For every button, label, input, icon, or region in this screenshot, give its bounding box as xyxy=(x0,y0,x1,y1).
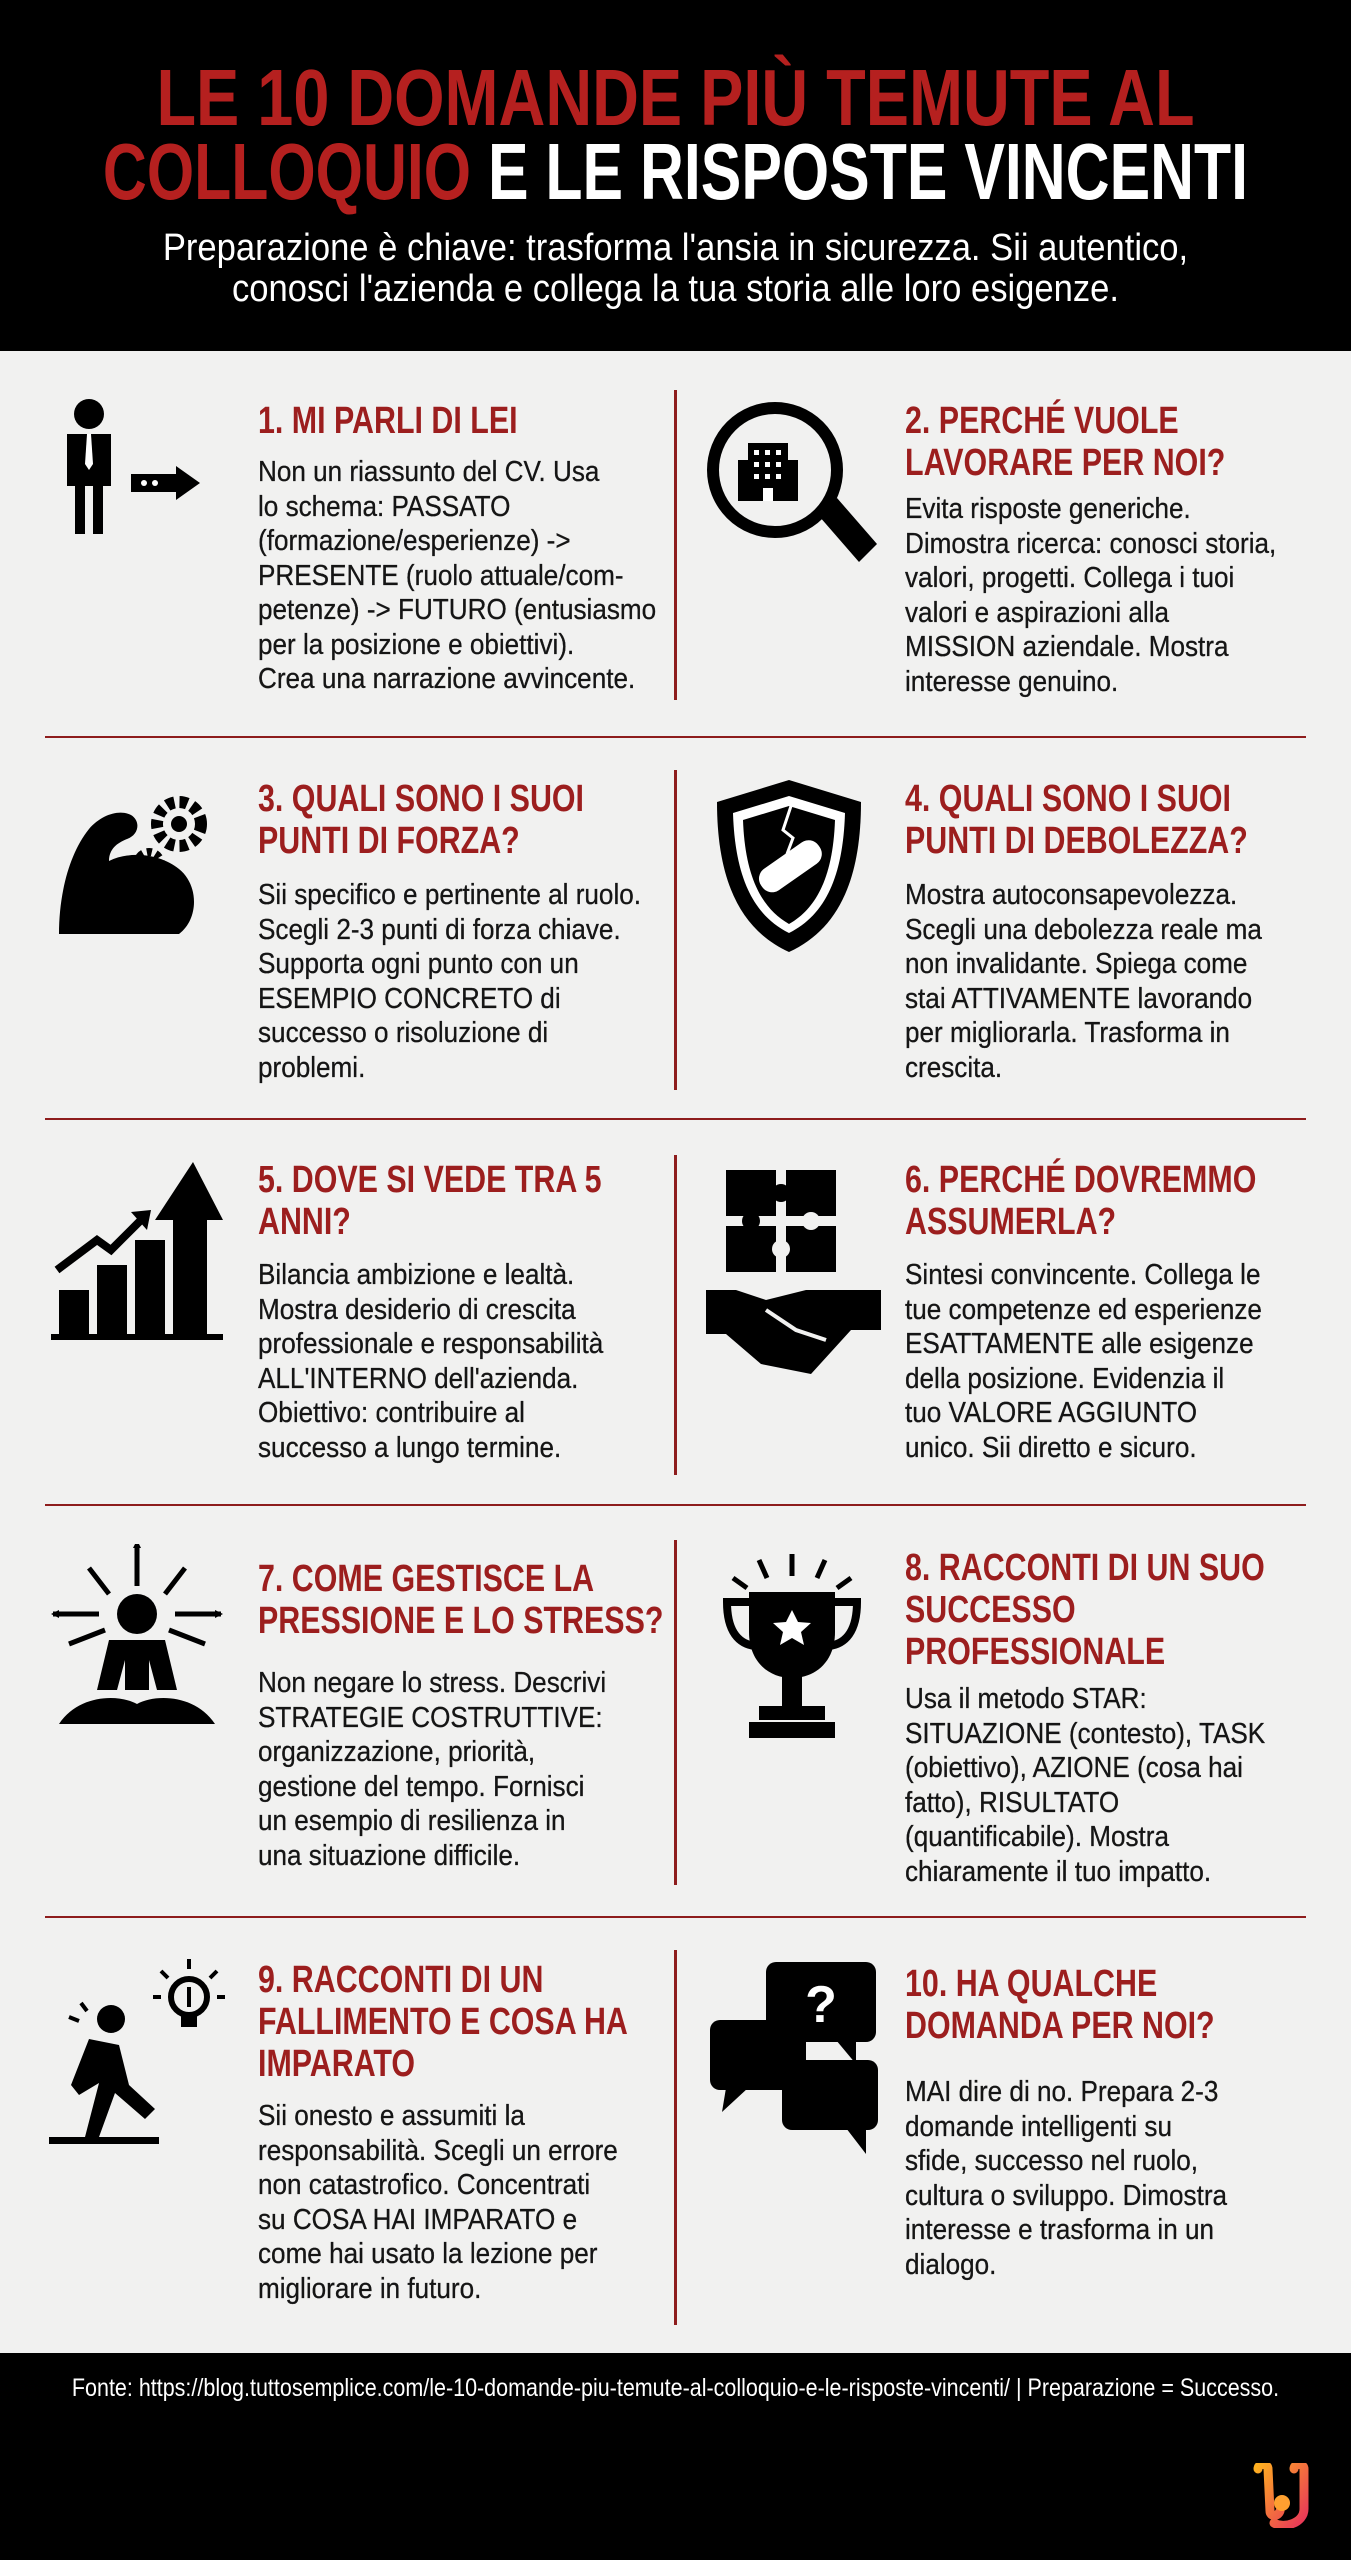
body 9: migliorare in futuro. xyxy=(258,2272,481,2304)
icon: falling person with bulb xyxy=(49,1959,225,2144)
heading 7: PRESSIONE E LO STRESS? xyxy=(258,1600,663,1642)
icon: person with arrow xyxy=(67,399,200,534)
panel 10 xyxy=(710,1962,1228,2280)
body 4: Mostra autoconsapevolezza. xyxy=(905,879,1237,911)
body 2 xyxy=(904,493,1276,698)
body 3 xyxy=(258,879,641,1084)
body 5: ALL'INTERNO dell'azienda. xyxy=(258,1362,578,1394)
icon: chat bubbles xyxy=(710,1962,878,2154)
source text: Fonte: https://blog.tuttosemplice.com/le-10-domande-piu-temute-al-colloquio-e-le-risposte-vincenti/ | Preparazione = Successo. xyxy=(72,2374,1279,2402)
body 3: Sii specifico e pertinente al ruolo. xyxy=(258,879,641,911)
body 6: tuo VALORE AGGIUNTO xyxy=(905,1397,1197,1429)
header: COLLOQUIO E LE RISPOSTE VINCENTI xyxy=(103,127,1248,216)
logo xyxy=(1250,2463,1312,2528)
panel 1 xyxy=(67,399,656,695)
icon: trophy xyxy=(723,1554,861,1738)
body 6: della posizione. Evidenzia il xyxy=(905,1362,1224,1394)
heading 5: ANNI? xyxy=(258,1201,351,1243)
heading 2: LAVORARE PER NOI? xyxy=(905,442,1225,484)
icon: chat bubbles: ? xyxy=(805,1976,837,2034)
body 9: responsabilità. Scegli un errore xyxy=(258,2134,618,2166)
panel 7 xyxy=(51,1544,663,1872)
panel 8 xyxy=(723,1547,1266,1888)
subtitle: Preparazione è chiave: trasforma l'ansia in sicurezza. Sii autentico, xyxy=(163,227,1188,269)
body 9: come hai usato la lezione per xyxy=(258,2238,598,2270)
icon: puzzle handshake xyxy=(706,1170,881,1374)
panel 4 xyxy=(717,778,1262,1084)
heading 9: FALLIMENTO E COSA HA xyxy=(258,2001,628,2043)
heading 1: 1. MI PARLI DI LEI xyxy=(258,400,518,442)
heading 8: SUCCESSO xyxy=(905,1589,1076,1631)
body 8: chiaramente il tuo impatto. xyxy=(905,1856,1211,1888)
body 1: (formazione/esperienze) -> xyxy=(258,525,571,557)
body 6: unico. Sii diretto e sicuro. xyxy=(905,1432,1197,1464)
body 6: Sintesi convincente. Collega le xyxy=(905,1259,1260,1291)
body 4: Scegli una debolezza reale ma xyxy=(905,914,1262,946)
body 9: Sii onesto e assumiti la xyxy=(258,2100,525,2132)
heading 10: 10. HA QUALCHE xyxy=(905,1963,1157,2005)
body 7: organizzazione, priorità, xyxy=(258,1736,535,1768)
heading 10: DOMANDA PER NOI? xyxy=(905,2005,1215,2047)
body 10: domande intelligenti su xyxy=(905,2110,1172,2142)
body 2: Evita risposte generiche. xyxy=(905,493,1191,525)
body 5: Mostra desiderio di crescita xyxy=(258,1294,576,1326)
heading 5: 5. DOVE SI VEDE TRA 5 xyxy=(258,1159,602,1201)
body 7: STRATEGIE COSTRUTTIVE: xyxy=(258,1702,603,1734)
body 10: cultura o sviluppo. Dimostra xyxy=(905,2180,1227,2212)
body 2: Dimostra ricerca: conosci storia, xyxy=(905,528,1276,560)
body 8: SITUAZIONE (contesto), TASK xyxy=(905,1718,1265,1750)
body 6: tue competenze ed esperienze xyxy=(905,1294,1262,1326)
icon: shield with bandage xyxy=(717,780,861,952)
body 2: valori, progetti. Collega i tuoi xyxy=(905,562,1234,594)
body 7: un esempio di resilienza in xyxy=(258,1805,566,1837)
subtitle xyxy=(163,227,1188,310)
heading 9: IMPARATO xyxy=(258,2043,415,2085)
subtitle: conosci l'azienda e collega la tua storia alle loro esigenze. xyxy=(232,268,1119,310)
body 1: petenze) -> FUTURO (entusiasmo xyxy=(258,594,656,626)
heading 10 xyxy=(905,1963,1215,2047)
body 8: fatto), RISULTATO xyxy=(905,1786,1119,1818)
icon: muscle gears xyxy=(59,796,207,934)
body 5 xyxy=(258,1259,604,1464)
body 9 xyxy=(258,2100,618,2304)
heading 3: PUNTI DI FORZA? xyxy=(258,820,520,862)
body 2: MISSION aziendale. Mostra xyxy=(905,631,1228,663)
body 1: per la posizione e obiettivi). xyxy=(258,628,574,660)
heading 8: PROFESSIONALE xyxy=(905,1631,1165,1673)
heading 6: 6. PERCHÉ DOVREMMO xyxy=(905,1159,1256,1201)
heading 9 xyxy=(258,1959,628,2085)
body 10: sfide, successo nel ruolo, xyxy=(905,2145,1198,2177)
body 8: Usa il metodo STAR: xyxy=(905,1683,1147,1715)
panel 5 xyxy=(51,1159,604,1464)
heading 2 xyxy=(905,399,1225,484)
body 4: non invalidante. Spiega come xyxy=(905,948,1247,980)
heading 8: 8. RACCONTI DI UN SUO xyxy=(905,1547,1265,1589)
body 7: gestione del tempo. Fornisci xyxy=(258,1770,584,1802)
body 10: dialogo. xyxy=(905,2248,996,2280)
panel 3 xyxy=(59,778,641,1084)
body 1: Non un riassunto del CV. Usa xyxy=(258,456,599,488)
body 6 xyxy=(905,1259,1262,1464)
body 3: Supporta ogni punto con un xyxy=(258,948,579,980)
heading 7: 7. COME GESTISCE LA xyxy=(258,1558,594,1600)
heading 4 xyxy=(905,778,1248,862)
body 8 xyxy=(905,1683,1266,1888)
body 8: (obiettivo), AZIONE (cosa hai xyxy=(905,1752,1243,1784)
body 3: problemi. xyxy=(258,1052,365,1084)
body 1: lo schema: PASSATO xyxy=(258,490,510,522)
body 1: PRESENTE (ruolo attuale/com- xyxy=(258,560,624,592)
body 3: Scegli 2-3 punti di forza chiave. xyxy=(258,914,621,946)
header xyxy=(0,0,1351,351)
heading 8 xyxy=(905,1547,1265,1673)
body 4: crescita. xyxy=(905,1052,1002,1084)
body 5: Obiettivo: contribuire al xyxy=(258,1397,525,1429)
body 7: Non negare lo stress. Descrivi xyxy=(258,1667,606,1699)
icon: growth chart xyxy=(51,1162,223,1340)
body 8: (quantificabile). Mostra xyxy=(905,1821,1169,1853)
heading 6 xyxy=(905,1158,1256,1243)
heading 7 xyxy=(258,1558,663,1642)
body 5: professionale e responsabilità xyxy=(258,1328,603,1360)
heading 3 xyxy=(258,778,584,862)
body 10: MAI dire di no. Prepara 2-3 xyxy=(905,2076,1218,2108)
heading 3: 3. QUALI SONO I SUOI xyxy=(258,778,584,820)
body 1: Crea una narrazione avvincente. xyxy=(258,663,635,695)
body 4: per migliorarla. Trasforma in xyxy=(905,1017,1230,1049)
body 2: valori e aspirazioni alla xyxy=(905,596,1169,628)
heading 5 xyxy=(258,1159,602,1243)
heading 6: ASSUMERLA? xyxy=(905,1201,1116,1243)
body 2: interesse genuino. xyxy=(905,666,1118,698)
body 10: interesse e trasforma in un xyxy=(905,2214,1214,2246)
icon: magnifier building xyxy=(707,402,877,562)
body 6: ESATTAMENTE alle esigenze xyxy=(905,1328,1254,1360)
body 7 xyxy=(258,1667,606,1872)
body 3: ESEMPIO CONCRETO di xyxy=(258,982,561,1014)
body 10 xyxy=(905,2075,1227,2282)
body 5: successo a lungo termine. xyxy=(258,1432,561,1464)
title xyxy=(103,53,1248,216)
panel 9 xyxy=(49,1959,628,2304)
body 4: stai ATTIVAMENTE lavorando xyxy=(905,982,1252,1014)
body 9: non catastrofico. Concentrati xyxy=(258,2169,590,2201)
icon: meditation xyxy=(51,1544,223,1724)
body 9: su COSA HAI IMPARATO e xyxy=(258,2204,577,2236)
heading 4: 4. QUALI SONO I SUOI xyxy=(905,778,1231,820)
body 3: successo o risoluzione di xyxy=(258,1017,548,1049)
panel 6 xyxy=(706,1158,1262,1464)
body 7: una situazione difficile. xyxy=(258,1840,520,1872)
footer xyxy=(0,2353,1351,2560)
heading 2: 2. PERCHÉ VUOLE xyxy=(905,400,1179,442)
body 4 xyxy=(905,879,1262,1084)
body 5: Bilancia ambizione e lealtà. xyxy=(258,1259,574,1291)
heading 4: PUNTI DI DEBOLEZZA? xyxy=(905,820,1248,862)
panel 2 xyxy=(707,399,1276,698)
body 1 xyxy=(258,456,656,695)
header: LE 10 DOMANDE PIÙ TEMUTE AL xyxy=(156,53,1195,142)
heading 9: 9. RACCONTI DI UN xyxy=(258,1959,543,2001)
